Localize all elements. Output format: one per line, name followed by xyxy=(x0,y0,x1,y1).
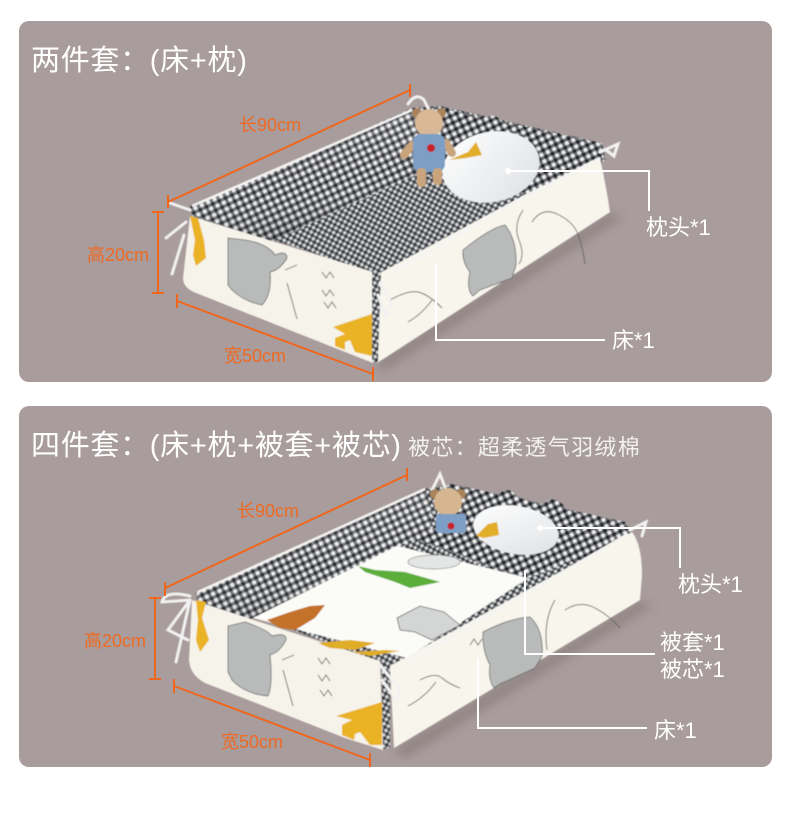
long bolster wall xyxy=(190,110,420,241)
dimension: width two-piece: 宽50cm xyxy=(224,346,286,366)
long wall xyxy=(197,489,432,622)
callout: duvet cover and filling: 被套*1 xyxy=(660,630,725,655)
dimension: width four-piece: 宽50cm xyxy=(221,732,283,752)
elephant right xyxy=(483,617,542,688)
scribbles xyxy=(282,600,620,706)
quilt xyxy=(253,546,528,658)
callout: duvet cover and filling: 被芯*1 xyxy=(660,657,725,682)
pillow ears xyxy=(495,490,570,545)
dimension: length four-piece: 长90cm xyxy=(237,501,299,521)
dimension: width four-piece xyxy=(174,679,370,767)
callout: pillow four-piece: 枕头*1 xyxy=(678,572,743,597)
elephant right xyxy=(463,225,516,296)
right face xyxy=(390,532,642,748)
blanket fold xyxy=(410,529,570,578)
yellow lion xyxy=(333,314,372,356)
back wall xyxy=(435,484,632,562)
front face xyxy=(189,600,383,750)
scribbles xyxy=(285,210,585,322)
giraffe left xyxy=(190,216,206,266)
wall shading xyxy=(197,489,432,622)
floor xyxy=(273,174,530,272)
callout: pillow two-piece xyxy=(505,168,711,240)
dimension: height four-piece xyxy=(84,598,161,679)
front face xyxy=(183,216,373,363)
bolster shading xyxy=(190,110,420,241)
title: two-piece set: 两件套：(床+枕) xyxy=(31,44,248,77)
illustration: two-piece bed xyxy=(166,97,622,370)
quilt giraffe xyxy=(318,640,400,656)
right face xyxy=(377,158,610,363)
ties xyxy=(166,97,618,315)
dimension: length two-piece: 长90cm xyxy=(239,115,301,135)
elephant left xyxy=(228,238,287,305)
giraffe left xyxy=(196,600,209,652)
callout: bed four-piece xyxy=(478,658,697,743)
subtitle: filling note: 被芯：超柔透气羽绒棉 xyxy=(408,435,641,460)
bed shadow xyxy=(393,600,652,758)
quilt cloud xyxy=(408,555,460,569)
crocodile xyxy=(358,566,440,588)
callout: bed four-piece: 床*1 xyxy=(654,718,697,743)
teddy bear xyxy=(404,108,452,187)
callout: pillow four-piece xyxy=(537,525,743,597)
dimension: length four-piece xyxy=(165,468,407,596)
callout: bed two-piece: 床*1 xyxy=(612,328,655,353)
title: four-piece set: 四件套：(床+枕+被套+被芯) xyxy=(31,429,402,462)
pillow giraffe xyxy=(476,522,499,538)
pillow ears xyxy=(478,116,552,150)
ties xyxy=(162,474,646,700)
teddy bear xyxy=(430,488,466,533)
callout: duvet cover and filling xyxy=(525,570,725,682)
corner seam xyxy=(372,272,381,362)
dimension: height two-piece xyxy=(87,212,164,293)
yellow lion xyxy=(336,702,382,745)
bed shadow xyxy=(373,212,622,370)
pillow xyxy=(436,123,546,211)
pillow giraffe xyxy=(449,142,482,160)
top base xyxy=(195,484,634,668)
callout: bed two-piece xyxy=(434,264,655,353)
dimension: height four-piece: 高20cm xyxy=(84,631,146,651)
elephant left xyxy=(228,622,286,696)
dimension: width two-piece xyxy=(177,294,373,381)
dimension: height two-piece: 高20cm xyxy=(87,245,149,265)
dimension: length two-piece xyxy=(168,84,410,208)
callout: pillow two-piece: 枕头*1 xyxy=(646,215,711,240)
top base xyxy=(188,106,606,276)
piping xyxy=(198,489,628,662)
piping xyxy=(192,110,600,272)
quilt elephant xyxy=(397,606,460,640)
panel: four-piece set xyxy=(19,406,772,767)
tiger xyxy=(267,605,325,630)
pillow xyxy=(469,499,563,561)
back wall xyxy=(417,108,604,195)
corner seam xyxy=(381,662,390,749)
illustration: four-piece bed xyxy=(162,474,652,758)
